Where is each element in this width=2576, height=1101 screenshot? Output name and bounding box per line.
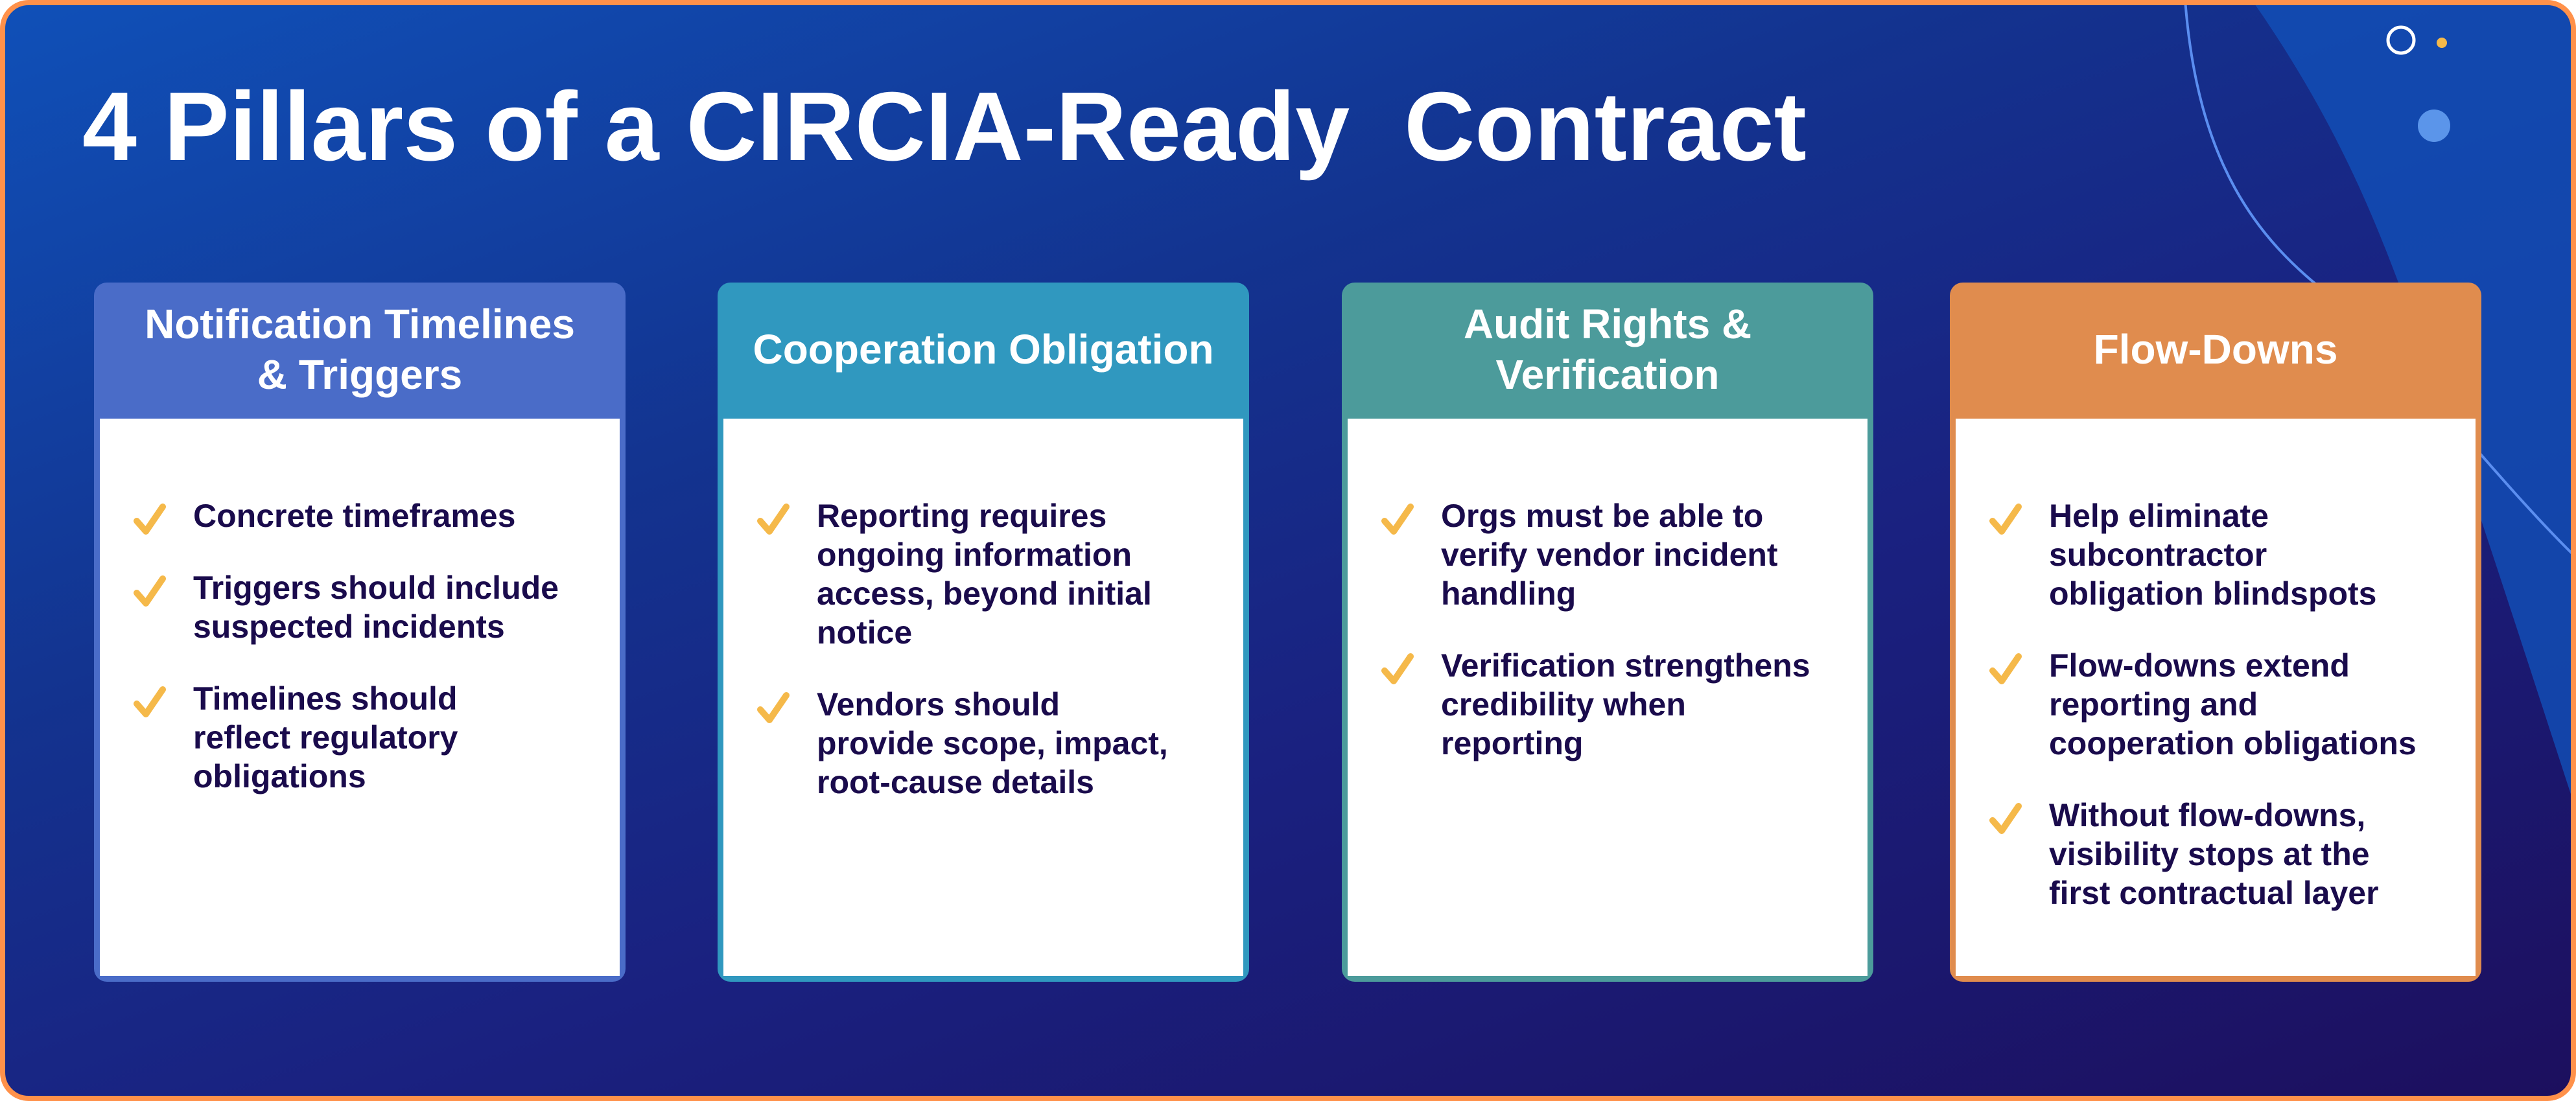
heading: & Triggers	[257, 351, 462, 398]
item: Reporting requires	[817, 498, 1107, 534]
item: provide scope, impact,	[817, 725, 1168, 761]
item: Orgs must be able to	[1441, 498, 1763, 534]
item: Timelines should	[193, 680, 458, 717]
item: reporting and	[2049, 686, 2258, 723]
item: access, beyond initial	[817, 575, 1152, 612]
panel: notification timelines	[94, 283, 626, 982]
item: Vendors should	[817, 686, 1060, 723]
item: reporting	[1441, 725, 1583, 761]
item: Without flow-downs,	[2049, 797, 2365, 833]
item	[1989, 797, 2379, 911]
item: first contractual layer	[2049, 875, 2379, 911]
item	[1381, 647, 1810, 761]
panel: audit rights	[1342, 283, 1873, 982]
item	[1989, 647, 2417, 761]
item: root-cause details	[817, 764, 1094, 800]
item: suspected incidents	[193, 608, 505, 645]
heading: Notification Timelines	[145, 301, 575, 347]
item	[1381, 498, 1778, 612]
item: handling	[1441, 575, 1576, 612]
item	[134, 680, 458, 794]
item: Verification strengthens	[1441, 647, 1810, 684]
item: cooperation obligations	[2049, 725, 2417, 761]
item: verify vendor incident	[1441, 537, 1778, 573]
heading: Verification	[1496, 351, 1719, 398]
panel: cooperation obligation	[718, 283, 1249, 982]
item: obligation blindspots	[2049, 575, 2376, 612]
item	[134, 570, 559, 645]
heading	[1464, 301, 1751, 398]
item: visibility stops at the	[2049, 836, 2370, 872]
item: Concrete timeframes	[193, 498, 515, 534]
heading: Cooperation Obligation	[753, 326, 1214, 373]
item: notice	[817, 614, 912, 651]
item: credibility when	[1441, 686, 1686, 723]
heading	[145, 301, 575, 398]
item: obligations	[193, 758, 366, 794]
item: reflect regulatory	[193, 719, 458, 756]
title: 4 Pillars of a CIRCIA-Ready Contract	[82, 71, 1807, 181]
item: Help eliminate	[2049, 498, 2269, 534]
panel: flow-downs	[1950, 283, 2481, 982]
item: Flow-downs extend	[2049, 647, 2350, 684]
item	[1989, 498, 2376, 612]
item: Triggers should include	[193, 570, 559, 606]
item	[757, 498, 1152, 651]
heading: Flow-Downs	[2094, 326, 2337, 373]
item: subcontractor	[2049, 537, 2267, 573]
heading: Audit Rights &	[1464, 301, 1751, 347]
item	[757, 686, 1168, 800]
item: ongoing information	[817, 537, 1132, 573]
